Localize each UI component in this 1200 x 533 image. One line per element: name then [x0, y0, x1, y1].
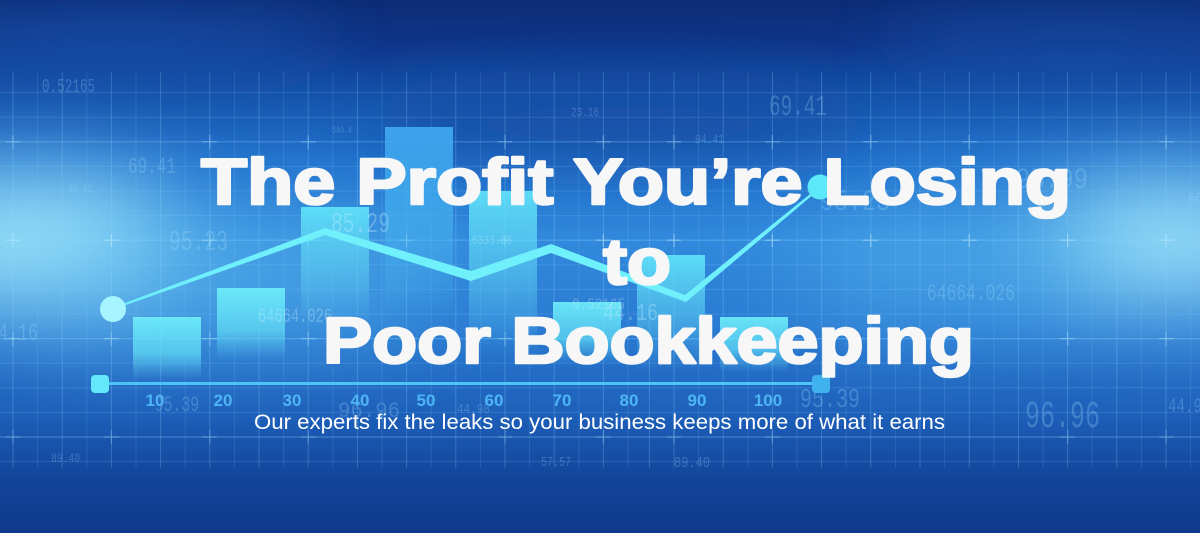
title: to: [603, 225, 671, 298]
axis labels: 70: [553, 391, 571, 410]
axis labels: 100: [754, 391, 782, 410]
background numbers: [0, 76, 1200, 472]
axis: [91, 375, 830, 410]
numbers over bars: 0.52165: [572, 296, 625, 314]
background numbers: 96.96: [1025, 396, 1100, 439]
title: [201, 145, 1071, 377]
axis labels: 80: [620, 391, 638, 410]
axis labels: 90: [688, 391, 706, 410]
subtitle: Our experts fix the leaks so your business keeps more of what it earns: [254, 410, 945, 434]
bar 70: [637, 255, 705, 370]
background numbers: 95.23: [820, 186, 890, 220]
title: The Profit You’re Losing: [201, 145, 1071, 218]
numbers over bars: 6333.86: [472, 233, 512, 248]
background numbers: 89.40: [674, 455, 710, 472]
bar 60: [553, 302, 621, 364]
bar 10: [133, 317, 201, 379]
bar 20: [217, 288, 285, 360]
axis labels: 20: [214, 391, 232, 410]
axis start cap: [91, 375, 109, 393]
axis labels: 40: [351, 391, 369, 410]
bar 30: [301, 207, 369, 325]
numbers over bars: 44.16: [603, 301, 658, 328]
background numbers: 0.52165: [42, 76, 95, 98]
axis end cap: [812, 375, 830, 393]
background numbers: 95.23: [169, 226, 228, 259]
background numbers: 57.57: [541, 455, 571, 471]
background numbers: 23.16: [571, 105, 599, 120]
trend line: [100, 174, 832, 322]
axis labels: 10: [146, 391, 164, 410]
numbers over bars: 64664.026: [258, 306, 332, 329]
background numbers: 69.41: [128, 154, 176, 180]
background numbers: 94.41: [68, 184, 92, 196]
background numbers: 64664.026: [927, 281, 1015, 307]
background numbers: 95.39: [155, 393, 199, 418]
axis labels: [146, 391, 782, 410]
background numbers: 44.98: [457, 402, 490, 418]
end point: [808, 174, 832, 200]
grid: [0, 72, 1200, 468]
background numbers: 89.40: [51, 451, 80, 466]
background numbers: 94.41: [695, 132, 724, 147]
start point: [100, 296, 126, 322]
title: Poor Bookkeeping: [323, 304, 974, 377]
axis labels: 60: [485, 391, 503, 410]
bar 40: [385, 127, 453, 317]
bar chart: [133, 127, 788, 379]
bar 50: [469, 191, 537, 356]
background numbers: 96.96: [338, 399, 400, 424]
axis labels: 50: [417, 391, 435, 410]
background numbers: 95.99: [1016, 164, 1088, 198]
numbers over bars: 85.29: [331, 208, 390, 241]
bar 80: [720, 317, 788, 372]
background numbers: 69.41: [769, 91, 827, 125]
background numbers: 95.39: [800, 386, 860, 416]
background numbers: 540.4: [332, 126, 352, 137]
axis labels: 30: [283, 391, 301, 410]
numbers over bars: [258, 208, 658, 329]
